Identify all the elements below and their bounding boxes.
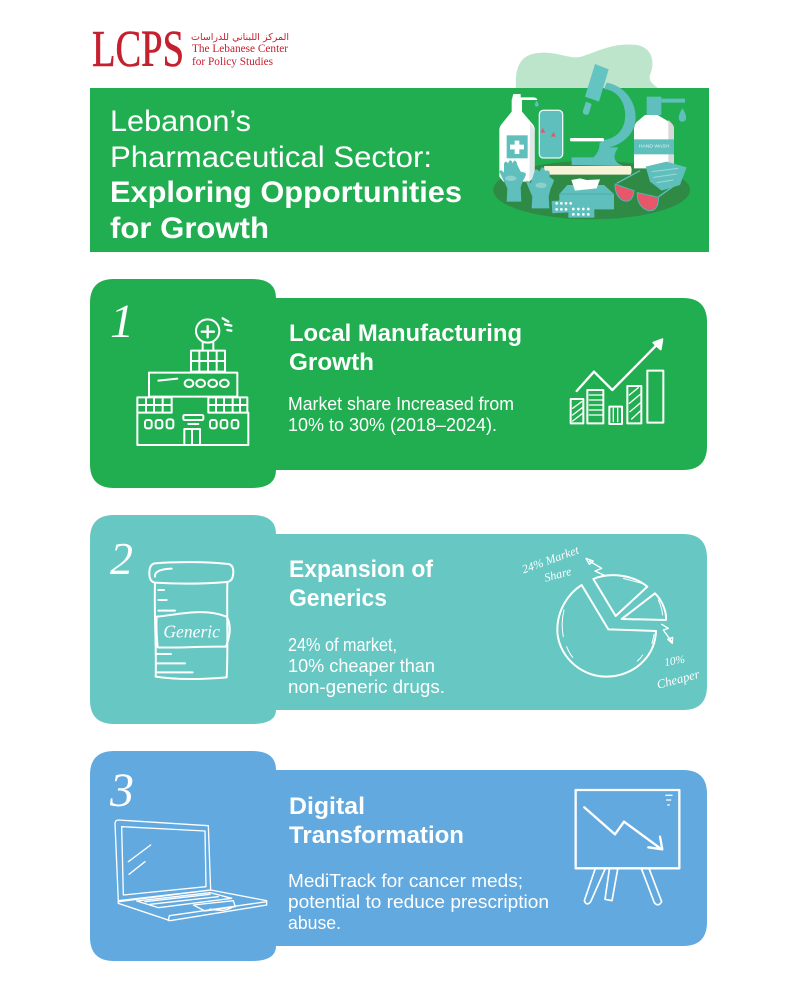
gloves <box>499 160 554 208</box>
heading: Transformation <box>289 822 464 849</box>
heading <box>289 793 464 849</box>
logo: LCPS: for Policy Studies <box>192 56 274 68</box>
heading: Local Manufacturing <box>289 320 522 347</box>
tissue box <box>559 178 614 209</box>
icon: laptop <box>115 820 267 921</box>
hand wash bottle <box>634 97 686 168</box>
icon: generic pill jar: Generic <box>163 621 220 641</box>
heading <box>289 320 522 376</box>
icon: pie chart: Cheaper <box>655 667 701 692</box>
title: Exploring Opportunities <box>110 176 462 209</box>
title: Pharmaceutical Sector: <box>110 141 432 174</box>
body text: MediTrack for cancer meds; <box>288 871 523 891</box>
panel: local manufacturing growth <box>90 279 707 488</box>
icon: pie chart <box>520 543 701 692</box>
microscope <box>544 64 636 175</box>
body text: 10% to 30% (2018–2024). <box>288 415 497 435</box>
logo: LCPS <box>92 21 289 78</box>
body text: 10% cheaper than <box>288 656 435 676</box>
body text: abuse. <box>288 913 341 933</box>
icon: generic pill jar <box>149 562 233 679</box>
heading: Generics <box>289 585 387 612</box>
panel: header banner <box>90 64 709 252</box>
icon: growth bar chart <box>571 339 663 424</box>
body text: 24% of market, <box>288 635 397 655</box>
logo: LCPS: The Lebanese Center <box>192 43 288 55</box>
heading: Expansion of <box>289 556 434 583</box>
illustration: medical supplies <box>493 64 690 219</box>
face mask <box>646 162 687 191</box>
icon: pie chart: 10% <box>663 654 686 669</box>
panel: expansion of generics <box>90 515 707 724</box>
icon: pie chart: Share <box>543 564 573 585</box>
body text: Market share Increased from <box>288 394 514 414</box>
logo: LCPS: LCPS <box>92 21 184 78</box>
body text <box>288 871 549 933</box>
heading <box>289 556 434 612</box>
icon: pie chart: 24% Market <box>520 543 581 576</box>
panel: digital transformation <box>90 751 707 961</box>
icon: hospital building <box>137 318 248 445</box>
body text <box>288 635 445 697</box>
red glasses <box>615 171 680 211</box>
hand wash bottle: HAND WASH <box>639 144 670 150</box>
number 1: 1 <box>110 295 134 348</box>
body text: non-generic drugs. <box>288 677 445 697</box>
pill packs <box>552 200 594 218</box>
heading: Growth <box>289 349 374 376</box>
title <box>110 105 462 245</box>
icon: presentation board with falling chart <box>576 790 679 905</box>
logo: LCPS: المركز اللبناني للدراسات <box>191 32 289 43</box>
body text <box>288 394 514 435</box>
decorative blob behind header illustration <box>516 44 659 89</box>
title: for Growth <box>110 212 269 245</box>
sanitizer pump bottle <box>499 94 539 182</box>
heading: Digital <box>289 793 365 820</box>
body text: potential to reduce prescription <box>288 892 549 912</box>
number 2: 2 <box>110 533 133 584</box>
title: Lebanon’s <box>110 105 251 138</box>
slide <box>539 110 563 158</box>
number 3: 3 <box>109 764 134 817</box>
